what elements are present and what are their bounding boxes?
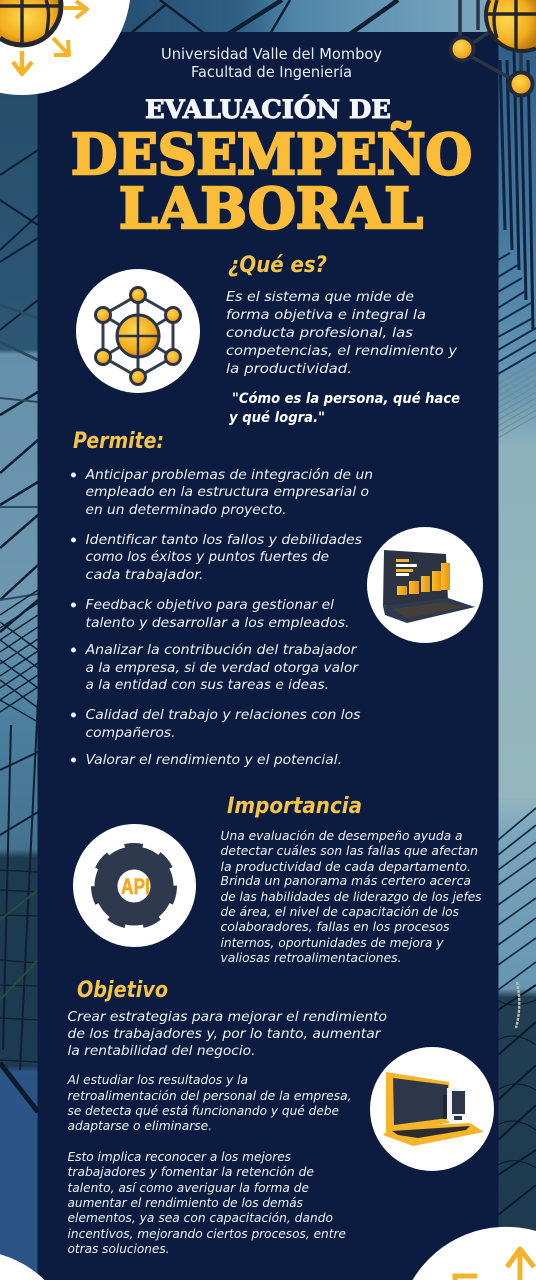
icon: arrow partial — [455, 1276, 477, 1280]
icon: yellow laptop and computer — [370, 1047, 494, 1171]
icon: globe top left — [0, 0, 61, 45]
icon: arrow diagonal — [53, 38, 69, 55]
list: permite: Calidad del trabajo y relaciones con los — [86, 707, 360, 723]
text: objetivo paragraph 2: elementos, ya sea con capacitación, dando — [68, 1210, 333, 1225]
list: permite: Anticipar problemas de integración de un — [84, 467, 373, 483]
title — [71, 95, 472, 242]
list: permite: talento y desarrollar a los empleados. — [86, 615, 350, 631]
text: importancia — [220, 828, 482, 965]
text: definition: conducta profesional, las — [226, 325, 413, 341]
text: objetivo paragraph 1: retroalimentación del personal de la empresa, — [68, 1088, 352, 1103]
title: EVALUACIÓN DE — [145, 95, 391, 124]
text: definition: la productividad. — [226, 361, 352, 377]
text: definition — [226, 289, 458, 377]
text: objetivo paragraph 1: Al estudiar los resultados y la — [67, 1072, 248, 1087]
icon: API gear: API — [121, 874, 150, 899]
title: DESEMPEÑO — [71, 122, 472, 188]
text: objetivo paragraph 2: aumentar el rendimiento de los demás — [68, 1195, 304, 1210]
icon: network top right — [450, 0, 536, 96]
text: importancia: internos, oportunidades de mejora y — [220, 935, 444, 950]
text: objetivo paragraph 1: adaptarse o eliminarse. — [68, 1118, 212, 1133]
decorative corner circle: bottom left — [0, 1254, 45, 1280]
text: objetivo paragraph 1: se detecta qué está funcionando y qué debe — [68, 1103, 339, 1118]
text: importancia: colaboradores, fallas en los procesos — [220, 919, 450, 934]
header: institution — [161, 45, 382, 81]
text: objetivo paragraph 2: talento, así como averiguar la forma de — [68, 1180, 309, 1195]
text: definition: competencias, el rendimiento y — [226, 343, 458, 359]
text: objetivo paragraph 2: incentivos, mejorando ciertos procesos, entre — [68, 1226, 346, 1241]
text: quote — [229, 391, 460, 426]
list: permite — [71, 467, 373, 768]
list: permite: en un determinado proyecto. — [86, 502, 286, 518]
text: objetivo paragraph 1 — [67, 1072, 351, 1133]
list: permite: a la empresa, si de verdad otorga valor — [86, 660, 359, 676]
icon: arrow up — [507, 1249, 534, 1280]
text: definition: Es el sistema que mide de — [226, 289, 414, 305]
text: quote: y qué logra." — [229, 410, 325, 426]
header: institution: Universidad Valle del Momboy — [161, 45, 382, 63]
text: objetivo paragraph 2: trabajadores y fomentar la retención de — [68, 1164, 314, 1179]
text: importancia: detectar cuáles son las fallas que afectan — [220, 843, 478, 858]
text: objetivo lead: la rentabilidad del negocio. — [68, 1043, 255, 1059]
text: importancia: de área, el nivel de capacitación de los — [220, 904, 460, 919]
list: permite: Valorar el rendimiento y el potencial. — [86, 752, 342, 768]
list: permite: empleado en la estructura empresarial o — [86, 484, 369, 500]
icon: laptop with bar chart — [367, 527, 483, 643]
heading: Importancia: Importancia — [227, 793, 362, 819]
text: importancia: la productividad de cada departamento. — [220, 859, 471, 874]
heading: Qué es: ¿Qué es? — [228, 252, 327, 278]
icon: API gear — [73, 824, 196, 947]
list: permite: como los éxitos y puntos fuertes de — [86, 549, 329, 565]
text: definition: forma objetiva e integral la — [226, 307, 426, 323]
text: importancia: Brinda un panorama más certero acerca — [220, 873, 471, 888]
text: quote: "Cómo es la persona, qué hace — [232, 391, 460, 407]
text: objetivo paragraph 2: otras soluciones. — [68, 1241, 170, 1256]
list: permite: Analizar la contribución del trabajador — [84, 642, 358, 658]
text: importancia: Una evaluación de desempeño ayuda a — [220, 828, 462, 843]
icon: arrow down — [13, 51, 32, 74]
list: permite: Identificar tanto los fallos y debilidades — [86, 532, 362, 548]
text: objetivo lead: de los trabajadores y, por lo tanto, aumentar — [68, 1026, 382, 1042]
icon: network circle — [76, 269, 200, 393]
text: objetivo paragraph 2 — [68, 1149, 346, 1256]
text: importancia: de las habilidades de liderazgo de los jefes — [220, 889, 482, 904]
list: permite: Feedback objetivo para gestionar el — [86, 597, 334, 613]
decorative corner circle with arrows: bottom right — [412, 1227, 536, 1280]
header: institution: Facultad de Ingeniería — [191, 63, 352, 81]
heading: Permite: Permite: — [73, 428, 164, 454]
text: objetivo lead: Crear estrategias para mejorar el rendimiento — [68, 1009, 387, 1025]
list: permite: cada trabajador. — [86, 567, 204, 583]
list: permite: compañeros. — [86, 725, 176, 741]
text: importancia: valiosas retroalimentaciones. — [220, 950, 402, 965]
list: permite: a la entidad con sus tareas e ideas. — [86, 677, 329, 693]
text: objetivo lead — [68, 1009, 387, 1059]
title: LABORAL — [119, 176, 423, 242]
heading: Objetivo: Objetivo — [77, 977, 168, 1003]
text: objetivo paragraph 2: Esto implica reconocer a los mejores — [68, 1149, 292, 1164]
icon: arrow right — [64, 1, 87, 18]
decorative corner circle: top left — [0, 0, 130, 95]
